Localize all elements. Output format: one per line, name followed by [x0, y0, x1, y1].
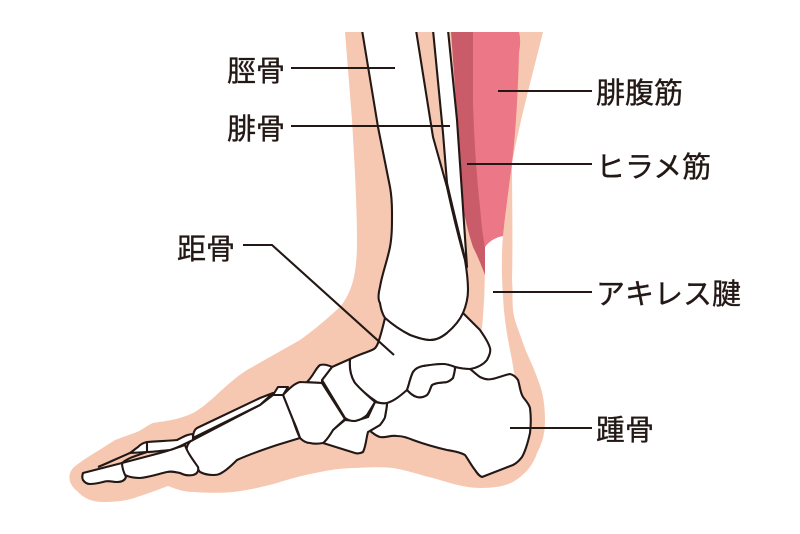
cuboid bone — [323, 402, 387, 453]
toe phalanx — [122, 445, 198, 478]
gastrocnemius muscle — [473, 32, 520, 247]
medial cuneiform bone — [283, 382, 345, 444]
navicular bone — [322, 359, 375, 421]
fibula bone — [433, 30, 467, 267]
leader line: Achilles tendon — [493, 291, 592, 293]
first metatarsal bone — [187, 395, 300, 475]
leader line: fibula — [291, 125, 450, 127]
leader line: calcaneus — [510, 427, 592, 429]
calcaneus bone — [370, 367, 531, 477]
label: talus: 距骨 — [177, 234, 235, 266]
leader line: talus — [243, 245, 394, 355]
label: Achilles tendon: アキレス腱 — [596, 278, 741, 311]
tibia bone — [362, 30, 468, 340]
soleus muscle — [451, 32, 485, 275]
label: fibula: 腓骨 — [227, 113, 285, 146]
label: gastrocnemius: 腓腹筋 — [596, 77, 683, 110]
thin toe bones — [98, 452, 147, 467]
white gap around the Achilles tendon — [470, 236, 516, 385]
foot and leg skin silhouette — [69, 32, 545, 502]
small upper cuneiform — [307, 365, 332, 383]
small toe tip — [130, 442, 147, 453]
upper metatarsal joint — [273, 387, 288, 395]
label: tibia: 脛骨 — [227, 56, 285, 88]
upper toe bone — [146, 434, 193, 452]
distal toe bone — [82, 463, 126, 484]
sustentaculum bone notch — [407, 364, 455, 397]
talus bone — [350, 313, 490, 403]
leader line: gastrocnemius — [498, 90, 592, 92]
top edge mask — [340, 20, 550, 32]
label: soleus: ヒラメ筋 — [596, 151, 711, 184]
leader line: tibia — [291, 67, 395, 69]
label: calcaneus: 踵骨 — [596, 414, 654, 447]
second metatarsal thin bone — [193, 393, 273, 438]
leader line: soleus — [467, 163, 592, 165]
